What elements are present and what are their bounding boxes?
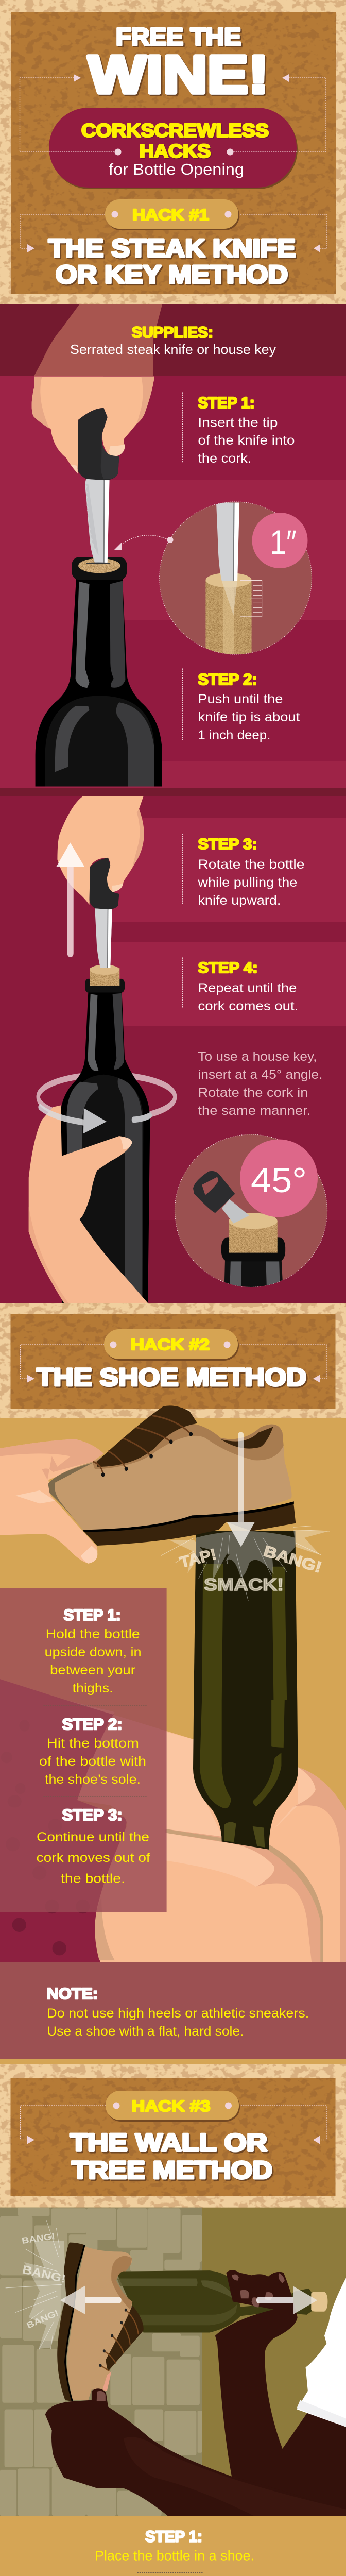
badge: 1 inch — [252, 513, 308, 568]
step 3: the bottle. — [61, 1872, 125, 1886]
bottle — [116, 2270, 312, 2333]
heading: steak knife method — [48, 235, 296, 289]
step 1: Hold the bottle — [46, 1627, 140, 1641]
person arm and hands — [45, 2270, 346, 2516]
panel: hack 2 steps — [0, 1588, 167, 1912]
knife blade — [85, 479, 109, 563]
step 1: thighs. — [73, 1681, 113, 1696]
hand — [0, 1439, 103, 1564]
step 2 text: knife tip is about — [198, 710, 300, 724]
sound effects: bang — [21, 2231, 67, 2331]
step 2 text: 1 inch deep. — [198, 728, 270, 742]
heading: steak knife method: THE STEAK KNIFE — [48, 235, 296, 263]
hack 3 pill — [106, 2091, 239, 2120]
subtitle: corkscrewless: CORKSCREWLESS — [81, 120, 269, 141]
shirt — [297, 2278, 346, 2427]
sound effects: TAP! — [178, 1546, 218, 1571]
arrow right — [256, 2286, 317, 2314]
rotation ring back — [38, 1075, 175, 1120]
step 1: STEP 1: — [145, 2528, 202, 2545]
panel: supplies — [0, 304, 346, 376]
heading: shoe method: THE SHOE METHOD — [37, 1364, 306, 1391]
house key note: the same manner. — [198, 1104, 310, 1118]
house key note: To use a house key, — [198, 1049, 317, 1064]
illustration: hand holding shoe — [0, 1405, 330, 1601]
arrow: callout pointer — [114, 535, 173, 550]
step 1: STEP 1: — [64, 1606, 120, 1624]
step 2 text: STEP 2: — [198, 670, 257, 688]
house key note: Rotate the cork in — [198, 1086, 308, 1100]
step 4 text — [198, 960, 298, 1013]
step 2: Hit the bottom — [47, 1736, 139, 1751]
hack 3 pill: HACK #3 — [132, 2097, 210, 2115]
step 3: Continue until the — [37, 1830, 149, 1844]
dotted divider step 1 — [182, 393, 183, 463]
step 3: cork moves out of — [37, 1851, 150, 1865]
step 1: between your — [50, 1663, 135, 1677]
background — [0, 2208, 346, 2516]
step 1 — [45, 1606, 142, 1696]
heading: wall or tree method: THE WALL OR — [70, 2129, 267, 2157]
up arrow — [67, 867, 74, 957]
step 1: upside down, in — [45, 1645, 142, 1659]
step 3 text — [197, 836, 304, 908]
panel: hack 3 header — [0, 2064, 346, 2208]
step 1 text — [198, 394, 295, 466]
step 3: STEP 3: — [62, 1806, 123, 1824]
hand — [57, 796, 144, 905]
house key note: insert at a 45° angle. — [198, 1067, 322, 1082]
impact burst — [6, 2220, 66, 2350]
step 3 text: Rotate the bottle — [198, 857, 304, 872]
knife handle — [90, 858, 119, 909]
subtitle pill — [49, 108, 297, 188]
badge: 1 inch: 1″ — [270, 523, 297, 561]
dotted divider step 3 — [182, 834, 183, 905]
dotted divider step 2 — [182, 669, 183, 740]
down arrow — [238, 1432, 244, 1522]
step 4 text: cork comes out. — [198, 999, 298, 1013]
bottle — [60, 991, 150, 1303]
fingernails — [97, 2273, 285, 2401]
step 2: of the bottle with — [39, 1754, 146, 1769]
callout: one inch detail — [114, 502, 312, 659]
panel: hack 2 note: Use a shoe with a flat, hard sole. — [47, 2024, 244, 2039]
badge: 45 degrees: 45° — [251, 1161, 307, 1200]
step 2 text: Push until the — [198, 692, 283, 706]
step 1 text: Insert the tip — [198, 416, 278, 430]
rotation arrow front — [40, 1107, 85, 1123]
subtitle: for bottle opening: for Bottle Opening — [109, 160, 244, 178]
hack 1 pill — [105, 199, 238, 229]
hack 2 pill: HACK #2 — [131, 1335, 210, 1353]
skin — [66, 1700, 346, 1962]
heading: wall or tree method — [70, 2129, 272, 2184]
knife handle — [78, 408, 119, 480]
step 1: Place the bottle in a shoe. — [95, 2548, 254, 2563]
arrow left — [60, 2286, 122, 2314]
heading: wall or tree method: TREE METHOD — [72, 2157, 272, 2184]
supplies heading: SUPPLIES: — [132, 324, 213, 341]
illustration: pulling knife and rotating bottle — [29, 796, 175, 1303]
bottle — [36, 579, 162, 787]
step 3 — [37, 1806, 150, 1886]
hack 2 pill — [104, 1329, 238, 1359]
dress — [0, 1679, 127, 1962]
step 3 text: STEP 3: — [198, 836, 257, 853]
illustration: hand with knife and bottle — [32, 377, 162, 787]
step 1 text: the cork. — [198, 451, 251, 466]
step 3 text: knife upward. — [198, 893, 281, 908]
step 4 text: Repeat until the — [198, 981, 297, 995]
illustration: thighs and dress — [0, 1679, 346, 1962]
panel: hack 2 scene background — [0, 1418, 346, 2064]
key — [222, 1199, 249, 1224]
brick wall — [0, 2208, 202, 2516]
heading: steak knife method: OR KEY METHOD — [56, 261, 288, 289]
step 2 — [39, 1715, 146, 1787]
step 2: the shoe’s sole. — [45, 1772, 141, 1787]
lower hand — [29, 1105, 148, 1303]
illustration: wall scene — [0, 2208, 346, 2516]
sound effects: bang: BANG! — [25, 2308, 60, 2331]
sound effects: SMACK! — [204, 1575, 284, 1594]
step 4 text: STEP 4: — [198, 960, 257, 976]
callout: key at 45 degrees — [175, 1134, 327, 1300]
illustration: bottle held upside down — [193, 1531, 298, 1850]
panel: hack 3 steps — [0, 2516, 346, 2576]
panel: hack 2 note — [0, 1962, 346, 2059]
step 1 text: STEP 1: — [198, 394, 254, 412]
shoe upper — [48, 1419, 292, 1530]
house key note — [198, 1049, 322, 1118]
panel: hack 1 steps 3-4 background — [0, 788, 346, 1303]
supplies text: Serrated steak knife or house key — [70, 342, 276, 357]
sound effects: bang: BANG! — [21, 2263, 67, 2285]
step 2 text — [198, 670, 300, 742]
panel: hack 2 note: Do not use high heels or athletic sneakers. — [47, 2006, 309, 2021]
laces — [93, 1415, 191, 1475]
dotted divider step 4 — [182, 958, 183, 1008]
hack 1 pill: HACK #1 — [132, 206, 209, 224]
tongue — [97, 1405, 198, 1467]
step 3 text: while pulling the — [197, 875, 297, 890]
sound effects: BANG! — [262, 1543, 324, 1577]
impact on bottle bottom — [170, 1530, 329, 1580]
title: wine: WINE! — [88, 45, 269, 104]
panel: title header — [0, 0, 346, 304]
sole — [83, 1502, 296, 1546]
sound effects — [178, 1543, 324, 1594]
sound effects: bang: BANG! — [21, 2231, 56, 2246]
hand — [32, 377, 154, 473]
step 1 text: of the knife into — [198, 433, 295, 448]
subtitle: hacks: HACKS — [140, 140, 211, 162]
badge: 45 degrees — [240, 1140, 318, 1217]
panel: hack 2 header — [0, 1303, 346, 1418]
step 1 — [95, 2528, 254, 2563]
step 2: STEP 2: — [62, 1715, 123, 1733]
title: free the: FREE THE — [116, 23, 241, 50]
panel: hack 2 note: NOTE: — [46, 1985, 98, 2003]
knife blade — [95, 908, 112, 968]
panel: hack 1 steps 1-2 background — [0, 376, 346, 788]
shoe — [57, 2243, 144, 2401]
